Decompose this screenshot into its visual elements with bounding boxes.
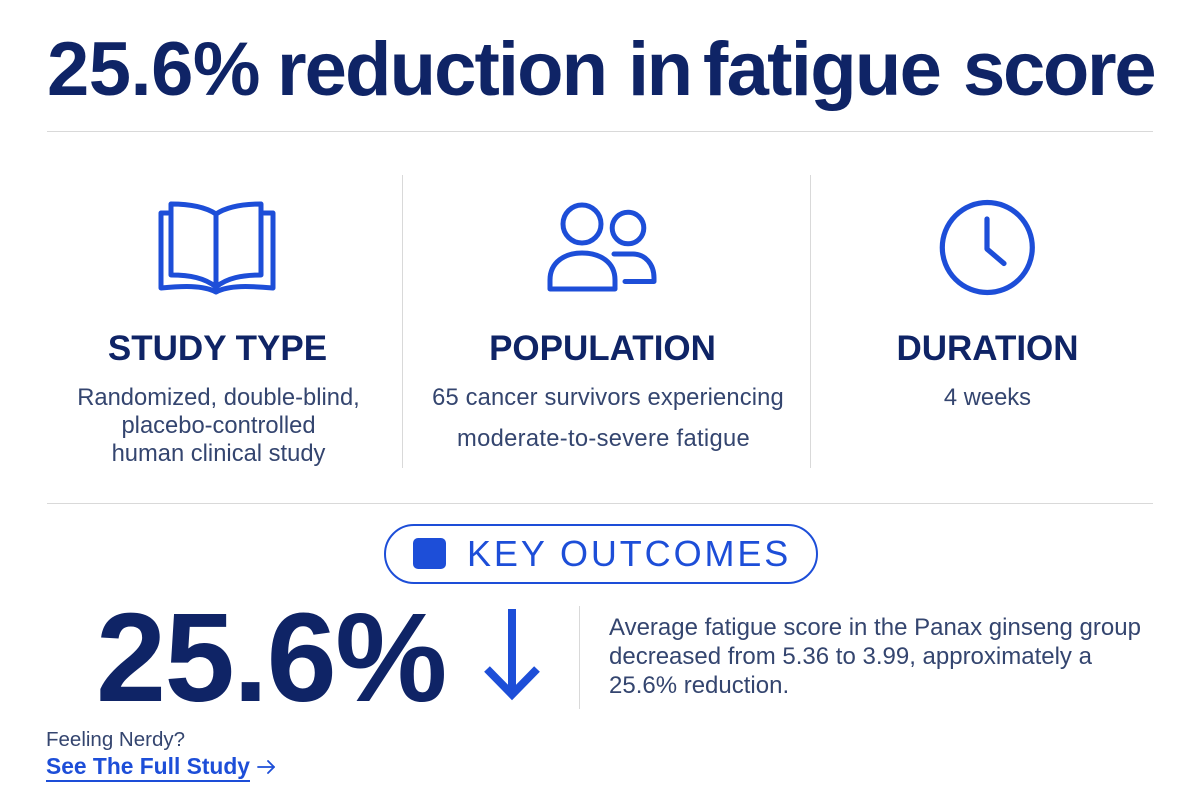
panel: population <box>432 202 784 452</box>
outcome description <box>609 614 1141 699</box>
heading: study type: STUDY TYPE <box>108 329 327 368</box>
arrow: link <box>257 760 275 774</box>
footer prompt: Feeling Nerdy? <box>46 728 185 751</box>
icon: square <box>413 538 446 569</box>
text: population: moderate-to-severe fatigue <box>457 425 750 452</box>
text: population <box>432 384 784 452</box>
icon: clock <box>940 200 1035 296</box>
title: score <box>963 27 1154 112</box>
panel: study type <box>77 202 360 467</box>
icon: people <box>548 202 656 292</box>
key outcomes badge <box>384 524 818 584</box>
text: duration: 4 weeks <box>944 384 1031 411</box>
text: study type: placebo-controlled <box>121 412 316 439</box>
title: fatigue <box>703 27 940 112</box>
badge label: KEY OUTCOMES <box>467 533 791 574</box>
text: study type: human clinical study <box>112 440 325 467</box>
title: in <box>628 27 691 112</box>
title <box>47 27 1154 112</box>
study link: See The Full Study <box>46 753 250 779</box>
outcome description: Average fatigue score in the Panax ginseng group <box>609 614 1141 641</box>
footer link block <box>46 728 275 782</box>
panel: duration <box>896 200 1079 411</box>
text: study type: Randomized, double-blind, <box>77 384 360 411</box>
outcome description: decreased from 5.36 to 3.99, approximately a <box>609 643 1092 670</box>
text: population: 65 cancer survivors experiencing <box>432 384 784 411</box>
big statistic: 25.6% <box>96 587 446 728</box>
icon: open book <box>158 202 276 294</box>
heading: population: POPULATION <box>489 329 716 368</box>
text: study type <box>77 384 360 467</box>
title: reduction <box>277 27 606 112</box>
outcome description: 25.6% reduction. <box>609 672 789 699</box>
heading: duration: DURATION <box>896 329 1079 368</box>
arrow: down <box>484 609 540 700</box>
title: 25.6% <box>47 27 260 112</box>
